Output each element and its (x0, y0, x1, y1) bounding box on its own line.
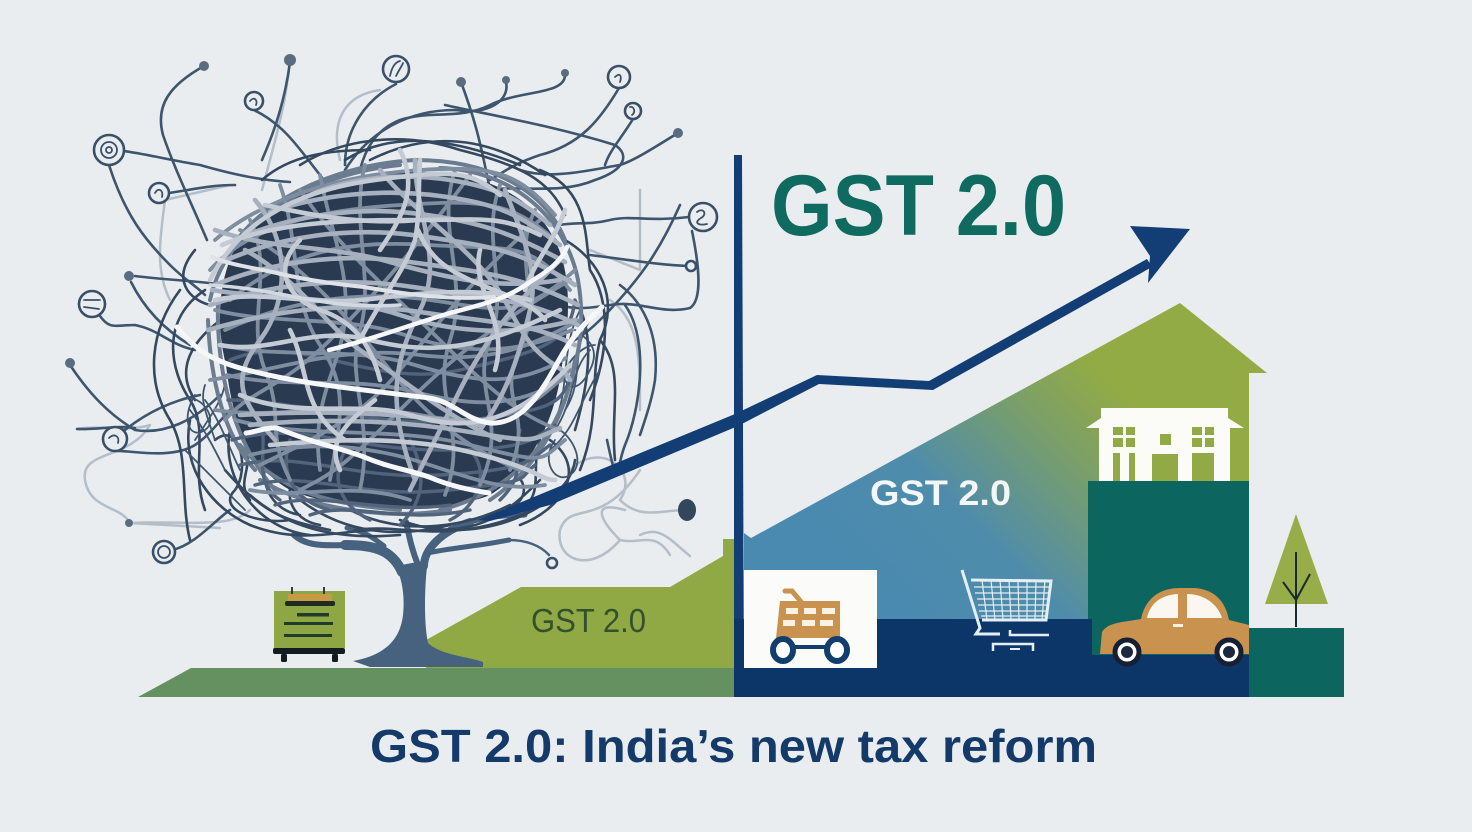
icon: car (1100, 588, 1249, 664)
icon: white panel with cart (744, 570, 877, 668)
mid grey strands (210, 165, 580, 500)
heading: GST 2.0: GST 2.0 (771, 158, 1066, 254)
teal base right (1249, 628, 1344, 697)
icon: clipboard cart (273, 587, 345, 662)
navy vertical divider (734, 155, 744, 697)
node: dot terminals (65, 54, 696, 527)
rim loops around the ball (154, 139, 615, 540)
dark ball mass (220, 172, 568, 508)
mesh on the sides (180, 310, 600, 510)
green hill with GST 2.0 label (426, 539, 734, 668)
white ribbons (177, 247, 602, 493)
icon: house (1086, 408, 1244, 481)
tree trunk and branches (294, 515, 549, 667)
tangled wire ball: complexity of the old tax system (65, 54, 717, 568)
rising growth arrow (478, 226, 1190, 521)
ground: green strip (138, 668, 734, 697)
icon: shopping cart (962, 570, 1051, 651)
caption title: GST 2.0: India’s new tax reform (370, 720, 1097, 772)
teal block behind house (1088, 481, 1249, 661)
icon: small tree (1265, 514, 1328, 627)
faint outer wires (77, 60, 690, 560)
node: circle terminals (79, 56, 717, 568)
hugging outline strands (208, 160, 581, 514)
pale ribbons (210, 150, 570, 480)
green to blue house-shaped hill (744, 303, 1267, 625)
light grey ribbons (208, 160, 578, 490)
dark blue strands (228, 300, 575, 525)
navy ground band (734, 619, 1249, 697)
label: GST 2.0 on hill: GST 2.0 (870, 474, 1011, 513)
dark outer wires to nodes (70, 62, 698, 550)
green hill with GST 2.0 label: GST 2.0 (531, 602, 646, 639)
